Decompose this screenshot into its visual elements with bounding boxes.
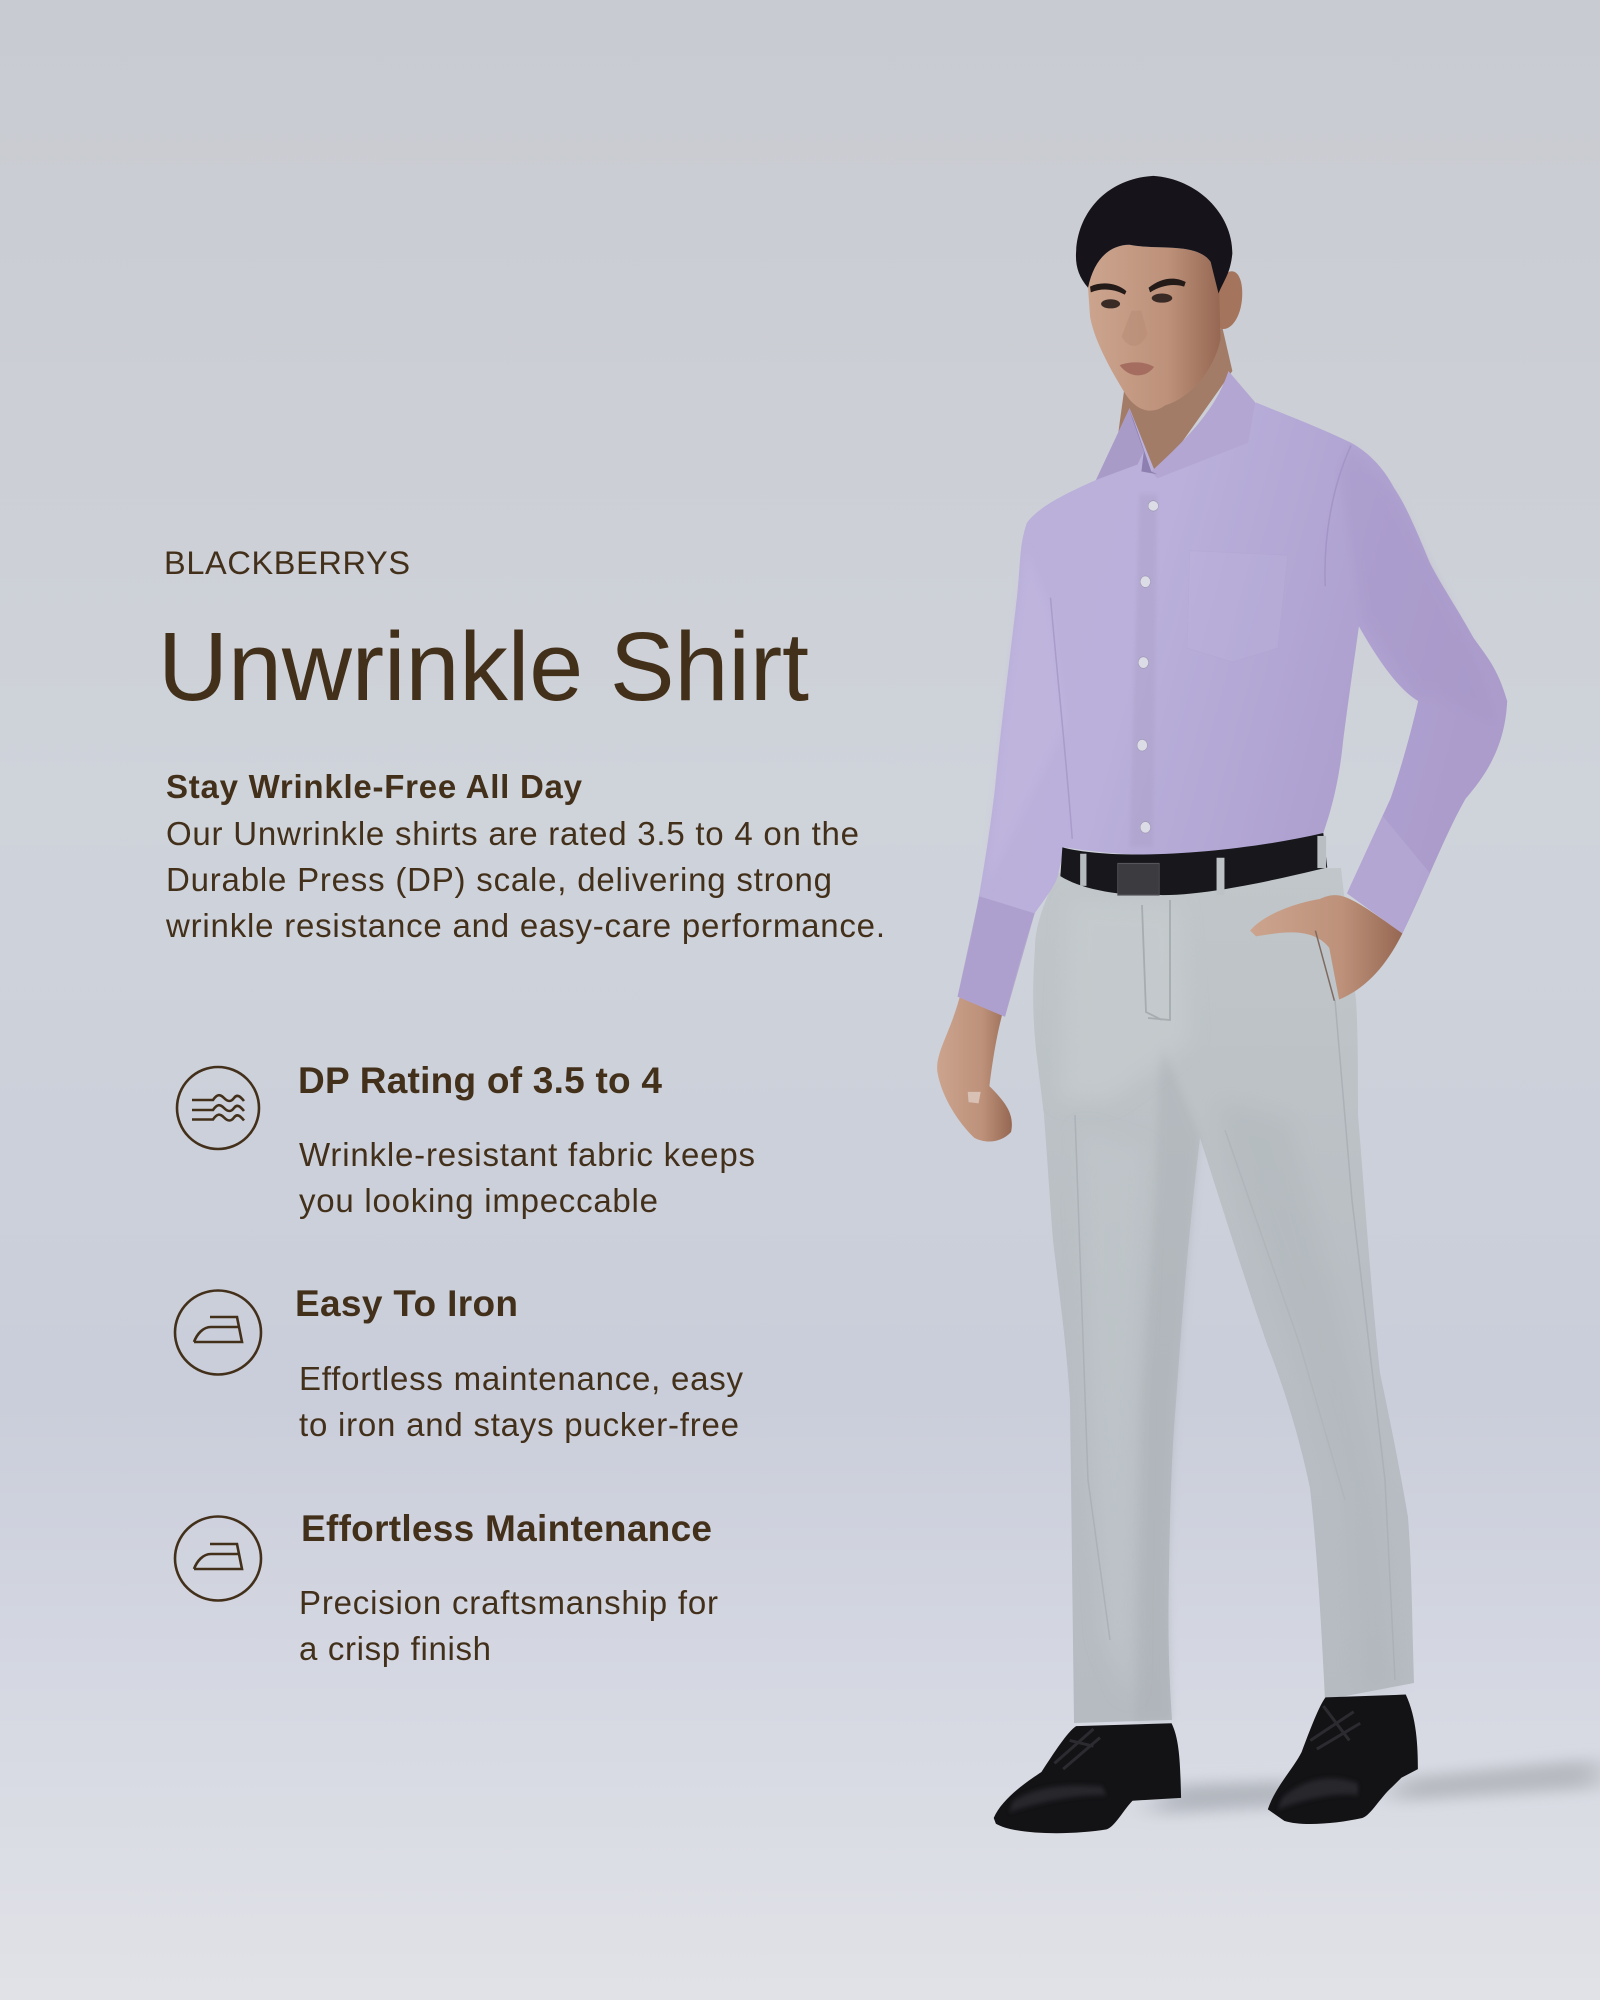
face	[1088, 245, 1221, 411]
icon: iron	[175, 1290, 261, 1374]
shirt placket	[1130, 494, 1157, 847]
feature: DP rating	[177, 1060, 755, 1219]
model figure	[937, 176, 1507, 1833]
chest pocket	[1187, 551, 1288, 662]
right sleeve shading	[1339, 448, 1497, 724]
feature: effortless maintenance	[175, 1508, 718, 1667]
feature description: you looking impeccable	[299, 1182, 658, 1219]
shirt buttons	[1137, 501, 1158, 833]
feature heading: DP Rating of 3.5 to 4	[298, 1060, 662, 1101]
feature description: Effortless maintenance, easy	[299, 1360, 744, 1397]
trousers	[1033, 868, 1414, 1723]
floor shadow	[1150, 1758, 1600, 1815]
brand name: BLACKBERRYS	[164, 545, 410, 581]
intro heading: Stay Wrinkle-Free All Day	[166, 768, 583, 805]
shirt	[958, 403, 1507, 1017]
left shoe	[994, 1723, 1181, 1833]
shoulder seam	[1325, 446, 1351, 586]
feature description	[299, 1584, 718, 1667]
intro text block	[165, 768, 885, 944]
ear	[1219, 271, 1242, 329]
right sleeve cuff	[1347, 816, 1430, 934]
upper body	[958, 176, 1507, 1017]
intro body: wrinkle resistance and easy-care performance.	[165, 907, 885, 944]
intro body: Durable Press (DP) scale, delivering strong	[166, 861, 832, 898]
feature description: Precision craftsmanship for	[299, 1584, 718, 1621]
feature description	[299, 1136, 755, 1219]
intro body	[165, 815, 885, 944]
feature: easy to iron	[175, 1283, 744, 1443]
belt	[1060, 833, 1327, 895]
belt buckle	[1118, 863, 1159, 895]
hair	[1076, 176, 1232, 294]
left hand	[937, 991, 1012, 1142]
title: Unwrinkle Shirt	[158, 612, 809, 721]
intro body: Our Unwrinkle shirts are rated 3.5 to 4 on the	[166, 815, 859, 852]
feature heading: Effortless Maintenance	[301, 1508, 712, 1549]
feature description: to iron and stays pucker-free	[299, 1406, 739, 1443]
left sleeve cuff	[958, 896, 1035, 1017]
feature description	[299, 1360, 744, 1443]
neck	[1118, 328, 1232, 477]
left sleeve highlight	[987, 552, 1066, 885]
icon: iron	[175, 1516, 261, 1600]
icon: fabric waves	[177, 1067, 259, 1149]
collar	[1096, 371, 1255, 480]
feature heading: Easy To Iron	[295, 1283, 518, 1324]
shoes	[994, 1695, 1418, 1833]
right shoe	[1268, 1695, 1418, 1824]
feature description: Wrinkle-resistant fabric keeps	[299, 1136, 755, 1173]
right hand in pocket	[1250, 895, 1402, 1001]
trouser fly	[1142, 900, 1170, 1020]
feature description: a crisp finish	[299, 1630, 491, 1667]
